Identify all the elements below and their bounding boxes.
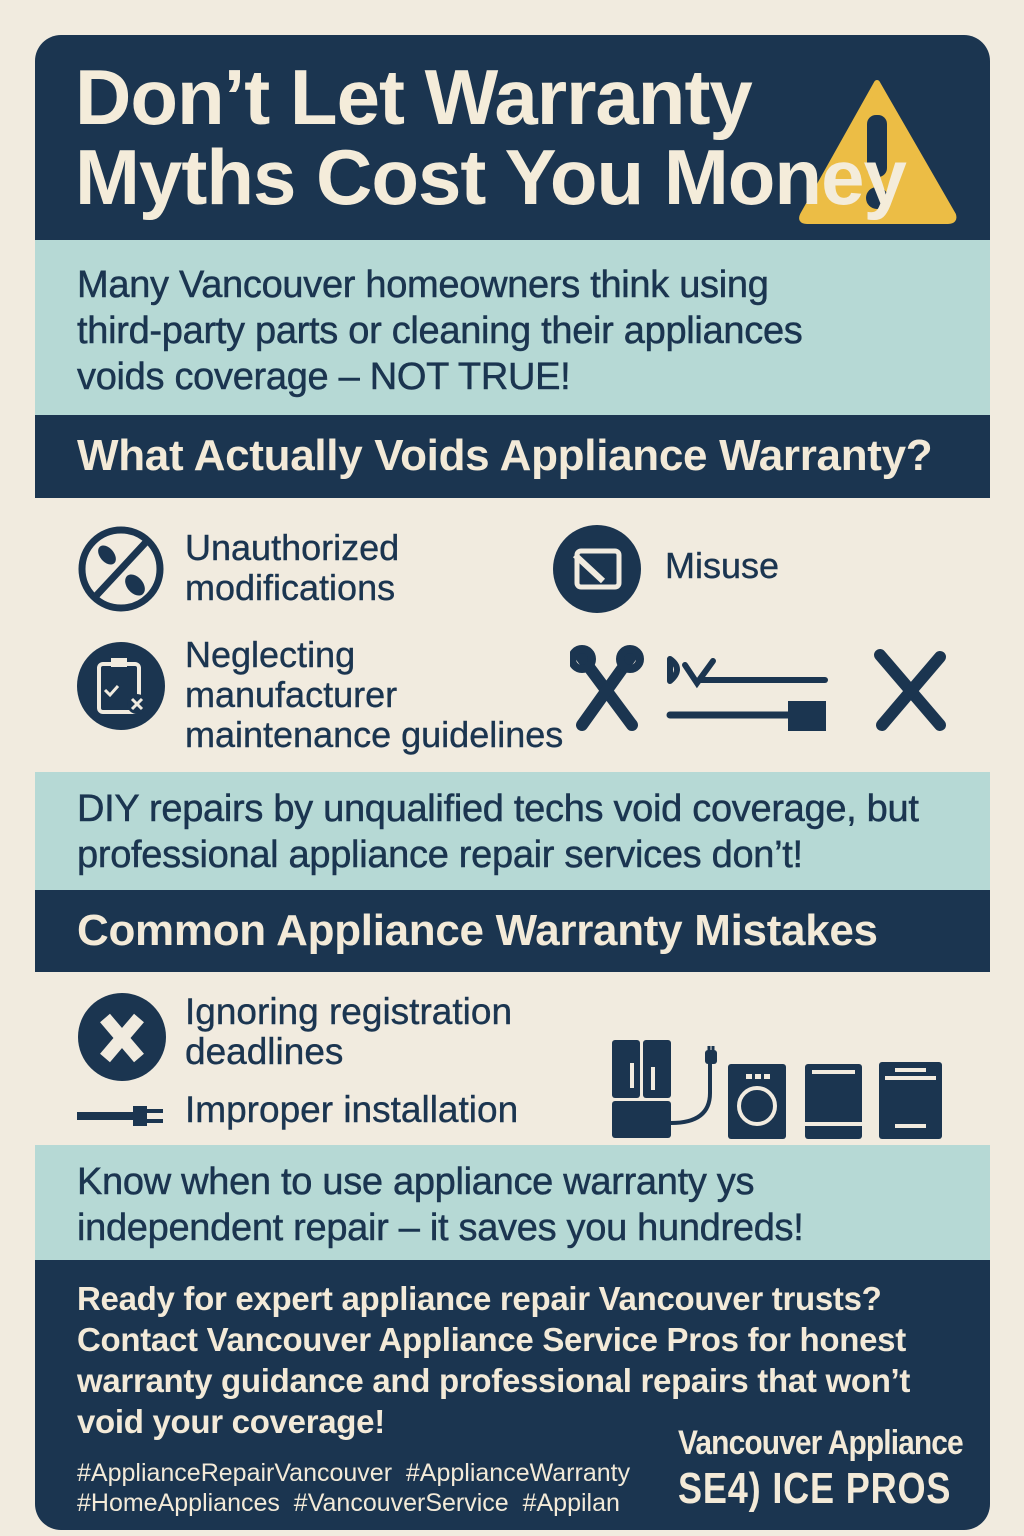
heading: what voids: What Actually Voids Appliance Warranty? [77, 431, 932, 480]
logo: Vancouver Appliance [678, 1424, 963, 1462]
text: neglecting guidelines [185, 634, 563, 755]
text: registration: Ignoring registration [185, 991, 512, 1032]
text: call to action: Contact Vancouver Appliance Service Pros for honest [77, 1321, 906, 1358]
text: neglecting guidelines: Neglecting [185, 634, 355, 675]
title: Don’t Let Warranty [75, 53, 752, 141]
footer panel [35, 1260, 990, 1530]
icon: X [78, 993, 166, 1081]
icon: clipboard [77, 642, 165, 730]
intro panel [35, 240, 990, 415]
text: unauthorized modifications: modifications [185, 567, 395, 608]
heading: common mistakes [35, 890, 990, 972]
title: Myths Cost You Money [75, 133, 906, 221]
callout: DIY repairs [35, 772, 990, 890]
heading: common mistakes: Common Appliance Warranty Mistakes [77, 906, 878, 955]
panel: voids list [77, 525, 946, 755]
text: unauthorized modifications: Unauthorized [185, 527, 399, 568]
callout: DIY repairs: professional appliance repair services don’t! [77, 834, 803, 876]
callout: DIY repairs: DIY repairs by unqualified techs void coverage, but [77, 788, 919, 830]
icon: no modifications [78, 526, 164, 612]
callout: know when: independent repair – it saves you hundreds! [77, 1207, 804, 1249]
text: hashtags: #ApplianceRepairVancouver #ApplianceWarranty [77, 1459, 630, 1487]
text: neglecting guidelines: maintenance guidelines [185, 714, 563, 755]
text: hashtags: #HomeAppliances #VancouverService #Appilan [77, 1489, 620, 1517]
logo: SE4) ICE PROS [678, 1464, 951, 1513]
callout: know when [35, 1145, 990, 1260]
icon: warning triangle [799, 80, 956, 224]
intro panel: third-party parts or cleaning their appliances [77, 310, 802, 352]
text: misuse: Misuse [665, 545, 779, 586]
intro panel: voids coverage – NOT TRUE! [77, 356, 570, 398]
text: call to action: Ready for expert appliance repair Vancouver trusts? [77, 1280, 882, 1317]
callout: know when: Know when to use appliance warranty ys [77, 1161, 754, 1203]
title band [35, 35, 990, 240]
text: neglecting guidelines: manufacturer [185, 674, 397, 715]
heading: what voids [35, 415, 990, 498]
text: call to action: void your coverage! [77, 1403, 385, 1440]
icon: tools [570, 645, 946, 731]
intro panel: Many Vancouver homeowners think using [77, 264, 769, 306]
icon: plug [77, 1106, 163, 1126]
text: unauthorized modifications [185, 527, 399, 608]
text: registration: deadlines [185, 1031, 343, 1072]
icon: misuse [553, 525, 641, 613]
text: call to action: warranty guidance and professional repairs that won’t [77, 1362, 910, 1399]
icon: appliances [612, 1040, 942, 1139]
text: hashtags [77, 1459, 630, 1517]
panel: mistakes [77, 991, 942, 1139]
text: improper installation: Improper installation [185, 1089, 518, 1130]
logo [678, 1424, 963, 1513]
text: registration [185, 991, 512, 1072]
title [75, 53, 906, 221]
text: call to action [76, 1280, 910, 1440]
